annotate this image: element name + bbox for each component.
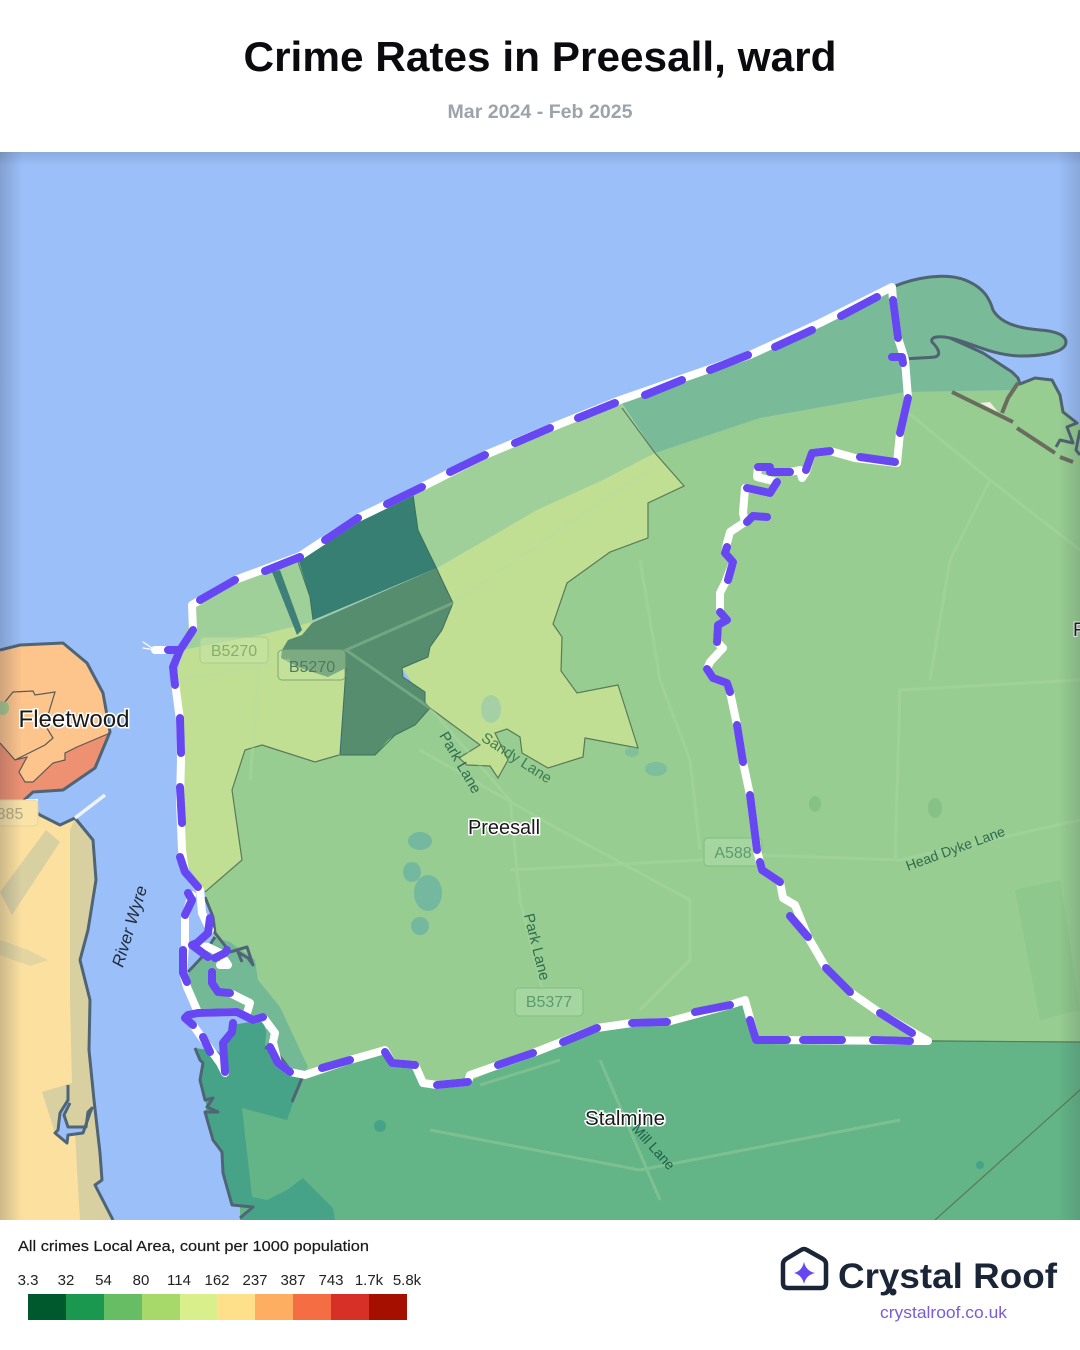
boundary: purple dashes [168,297,912,1085]
water [0,152,1080,1220]
legend values: 237 [242,1272,268,1289]
legend values: 387 [280,1272,306,1289]
groyne strip [272,570,302,635]
panel: Fleetwood peninsula south land [0,800,113,1220]
place label: Fleetwood: Fleetwood [18,706,130,733]
road shield: B5385 clipped [0,800,38,826]
panel: south Stalmine area [240,1000,1080,1220]
estuary water patch [218,1052,220,1054]
subtitle: date range: Mar 2024 - Feb 2025 [448,102,633,123]
road shield: B5270 west: B5270 [211,643,257,660]
legend title: All crimes Local Area, count per 1000 population [18,1238,369,1255]
road label: Head Dyke Lane: Head Dyke Lane [904,823,1007,874]
road shield: B5270 west [200,637,268,663]
ponds [374,695,984,1169]
estuary coast outline [188,897,302,1218]
logo wordmark: Crystal Roof [838,1257,1057,1296]
road shield: B5270 east [278,650,345,680]
legend values: 114 [167,1272,191,1289]
panel: yellow-green medium crime area [402,453,684,778]
water label: River Wyre: River Wyre [108,883,151,969]
legend [18,1238,422,1320]
road label: Mill Lane: Mill Lane [629,1120,679,1173]
region boundaries [205,408,1080,1220]
panel: pale coastal green [182,400,655,650]
panel: dark green settlement block [281,568,453,755]
legend values: 54 [95,1272,112,1289]
legend values: 743 [318,1272,344,1289]
sea wall [952,383,1073,462]
road label: Park Lane south: Park Lane [520,912,553,982]
road shield: B5270 east: B5270 [289,659,335,676]
road shield: B5377: B5377 [526,994,572,1011]
icon: house with star [783,1249,826,1288]
panel: coastal south-west dark teal [195,1020,335,1220]
map [0,152,1080,1220]
ward boundary [143,287,928,1085]
road shield: B5377 [515,988,583,1016]
logo key tail on the y [890,1288,896,1296]
road shield: A588: A588 [714,845,752,862]
panel: main ward and east land [205,378,1080,1095]
legend values: 162 [204,1272,230,1289]
panel: west yellow-green area [176,622,346,892]
road label: Park Lane north: Park Lane [435,729,484,797]
road label: Sandy Lane: Sandy Lane [478,729,555,787]
logo: Crystal Roof [783,1249,1057,1322]
panel: northern teal coastal area [620,276,1066,453]
legend values: 3.3 [18,1272,38,1289]
legend values: 1.7k [355,1272,384,1289]
place label: Preesall: Preesall [468,817,540,839]
logo url: crystalroof.co.uk [880,1304,1008,1322]
roads [180,410,1080,1200]
map edge shading [0,152,22,1220]
panel: estuary teal strip [188,937,308,1077]
legend values: 5.8k [393,1272,422,1289]
panel: darkest north block [298,490,437,620]
legend values [18,1272,422,1289]
title: Crime Rates in Preesall, ward [244,33,836,80]
legend values: 32 [58,1272,74,1289]
panel: Fleetwood high crime areas [0,643,110,818]
road shield: A588 [704,838,762,866]
place label: Stalmine: Stalmine [585,1108,665,1130]
legend values: 80 [133,1272,149,1289]
spit outline [895,276,1080,455]
legend colour scale [28,1294,407,1320]
inset green parcel [495,729,522,760]
boundary: white casing [155,287,928,1085]
